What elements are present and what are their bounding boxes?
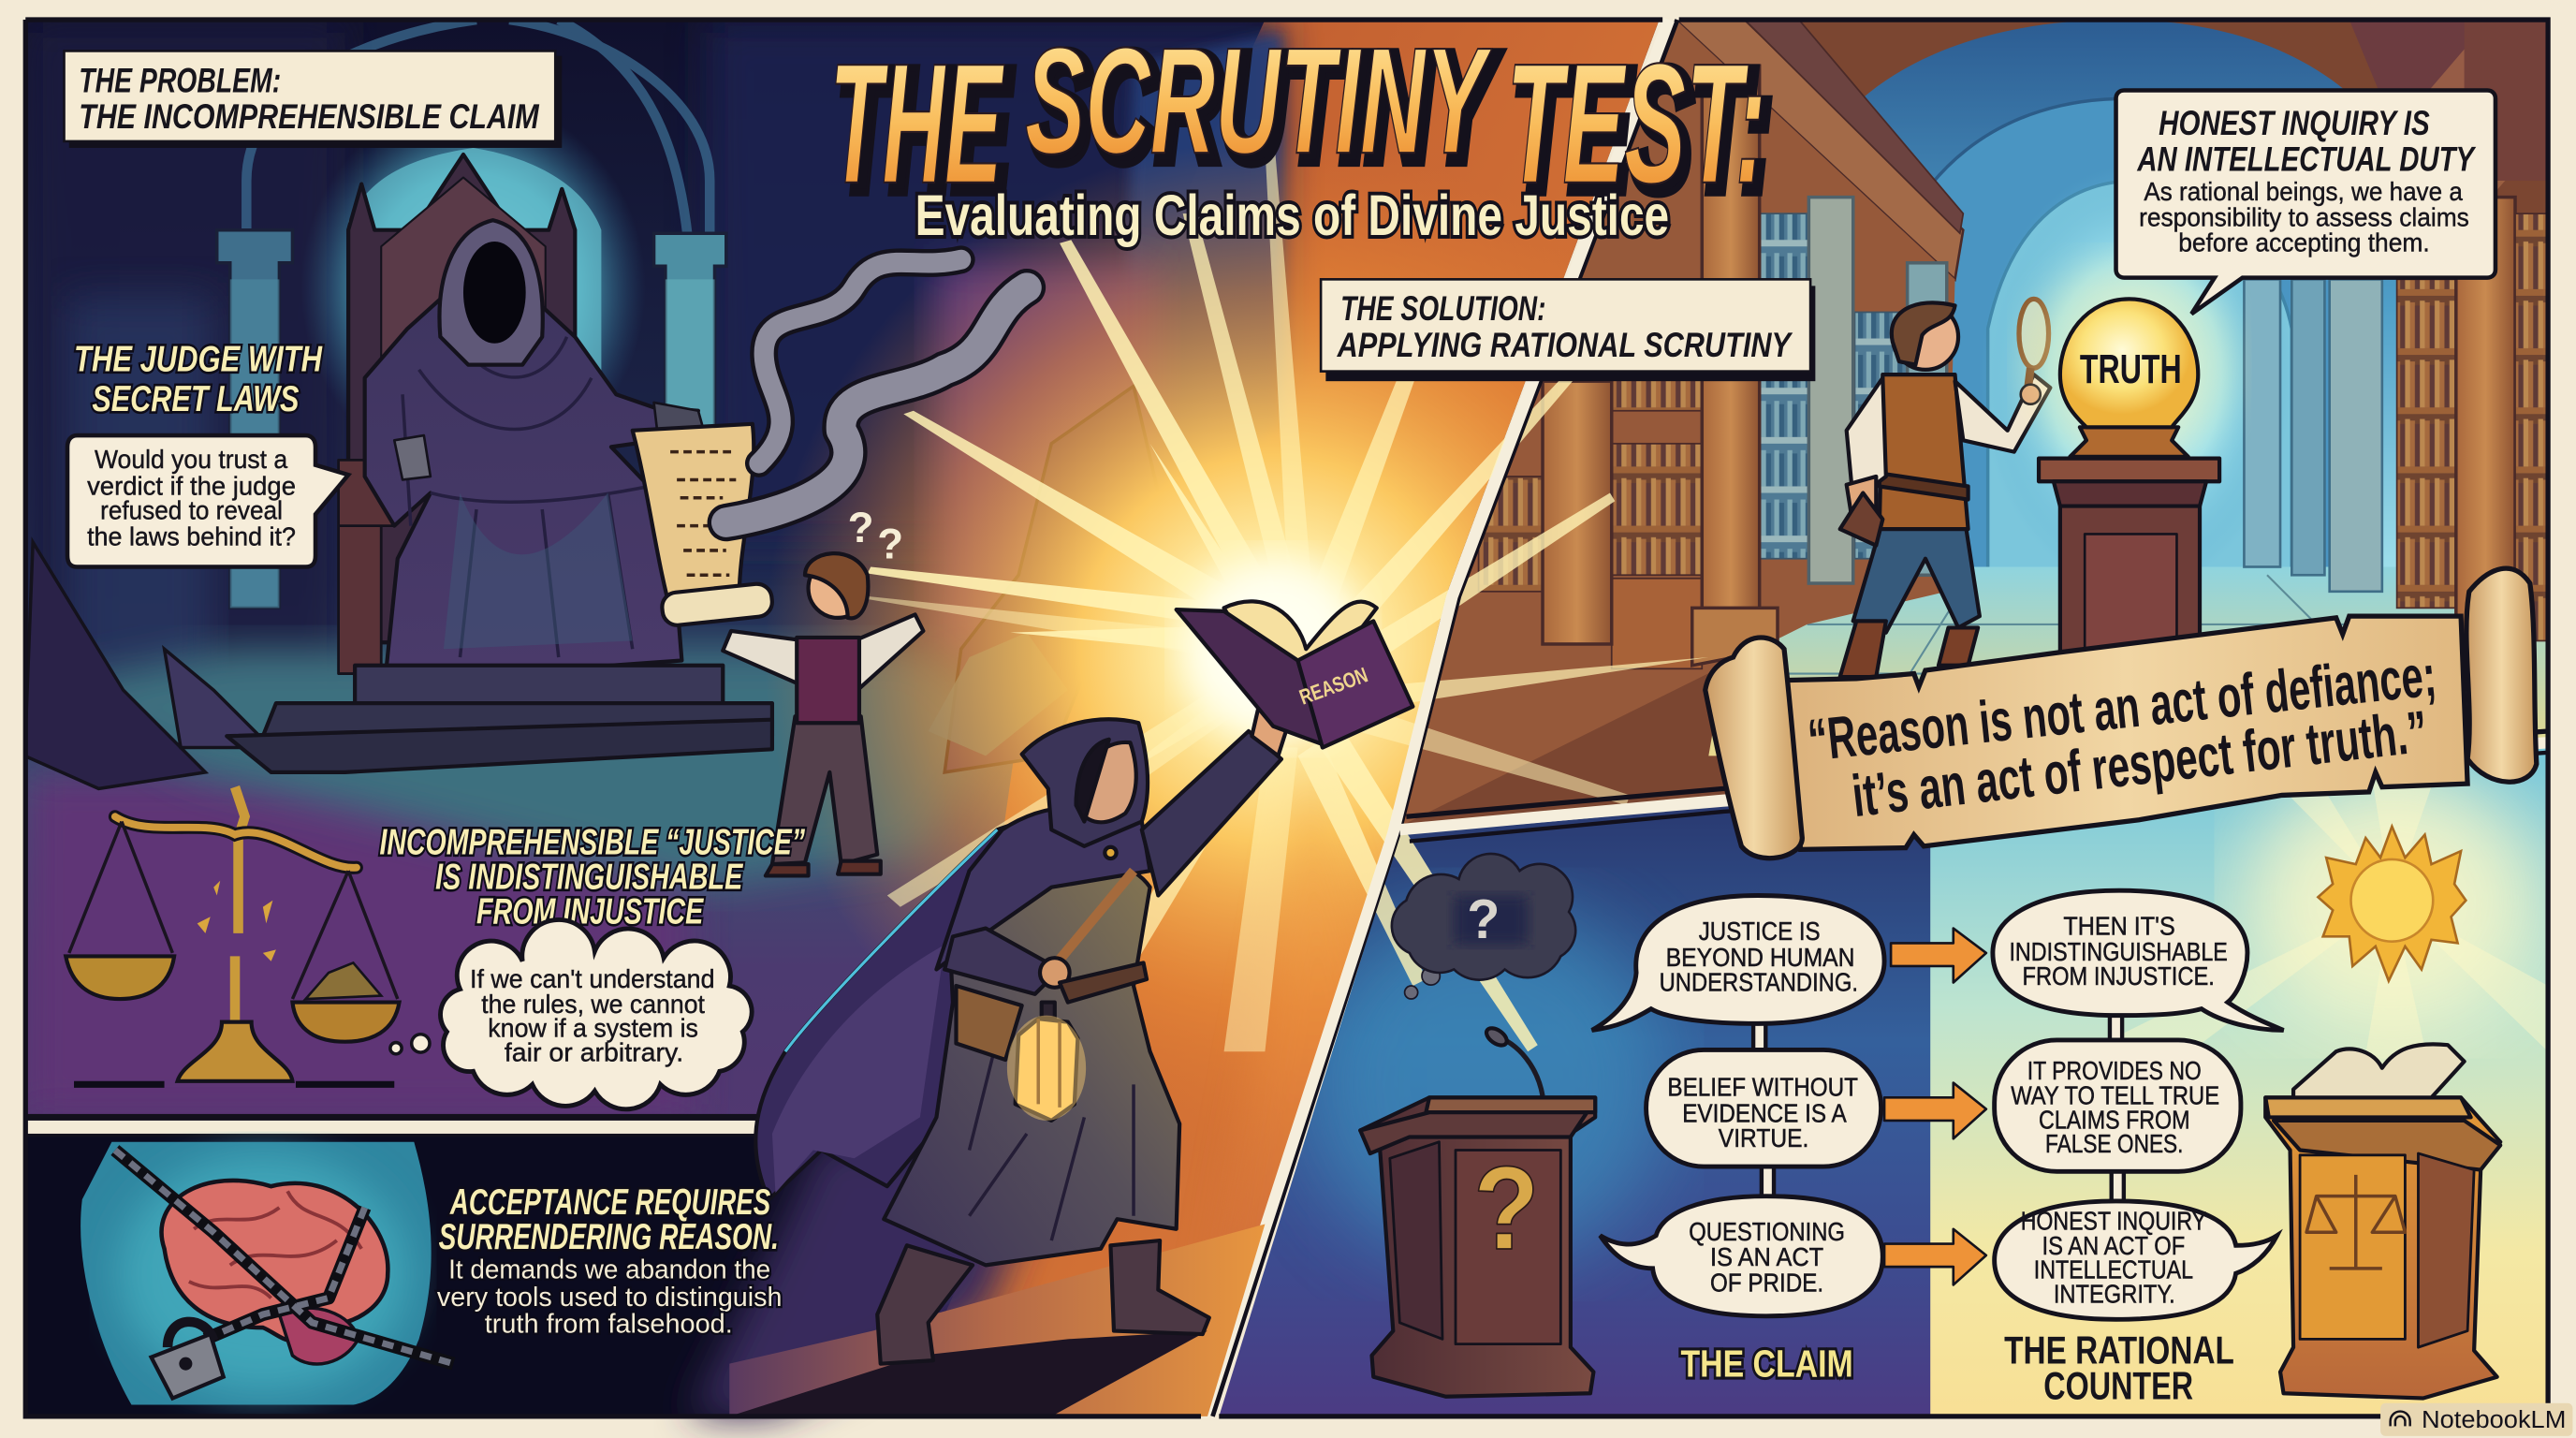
arrow 2	[1884, 1083, 1986, 1138]
book of reason: REASON	[1296, 662, 1370, 710]
strap	[1051, 871, 1134, 969]
broken scales of justice	[66, 787, 400, 1084]
padlock	[168, 1322, 213, 1347]
panel: the claim side	[1220, 806, 1930, 1414]
right boot	[1110, 1240, 1209, 1334]
speech bubble: would you trust a verdict: verdict if the judge	[87, 471, 296, 500]
badge icon	[2391, 1412, 2410, 1426]
counter bubble 2: WAY TO TELL TRUE	[2011, 1080, 2219, 1109]
heading box: the problem: THE INCOMPREHENSIBLE CLAIM	[79, 97, 540, 136]
floor	[1708, 566, 2548, 756]
NotebookLM badge	[2380, 1403, 2572, 1436]
counter bubble 1: THEN IT'S	[2063, 912, 2175, 941]
panel: the rational counter side	[1930, 723, 2554, 1430]
thought bubble: rules: If we can't understand	[470, 964, 714, 993]
claim bubble 2: VIRTUE.	[1719, 1123, 1808, 1152]
title	[829, 17, 1773, 248]
lower-left panel divider	[24, 1114, 829, 1138]
boy with question marks	[723, 504, 923, 875]
hood	[1022, 719, 1148, 846]
lantern	[1016, 1019, 1077, 1121]
hooded figure with lantern	[755, 694, 1290, 1364]
title: THE	[838, 35, 1013, 226]
counter bubble 3: INTELLECTUAL	[2034, 1255, 2193, 1284]
comparison arrows	[1884, 929, 1986, 1284]
right columns and shelves	[2244, 279, 2280, 566]
quote scroll banner	[1705, 568, 2537, 858]
ceiling ribs	[1676, 20, 1963, 279]
judge hand	[654, 403, 707, 440]
cave glow	[80, 1142, 432, 1405]
scroll of secret laws	[633, 424, 773, 626]
orb base	[2070, 427, 2188, 457]
burst of light	[777, 154, 1526, 1129]
shoulder cape	[936, 807, 1150, 969]
reason podium with open book	[2265, 1044, 2500, 1399]
speech bubble: honest inquiry: responsibility to assess claims	[2139, 202, 2469, 231]
thought bubble: rules: fair or arbitrary.	[505, 1038, 683, 1067]
thought bubble: rules	[390, 919, 752, 1109]
label: the rational counter: THE RATIONAL	[2004, 1328, 2234, 1372]
heading box: the problem: THE PROBLEM:	[79, 61, 281, 99]
label: the claim: THE CLAIM	[1680, 1343, 1853, 1386]
question marks: ?	[877, 521, 903, 568]
title: TEST:	[1506, 28, 1766, 219]
heading box: the solution	[1321, 279, 1815, 381]
speech bubble: would you trust a verdict: refused to reveal	[100, 496, 283, 525]
text: acceptance requires surrendering reason	[437, 1182, 782, 1339]
claim bubble 1: UNDERSTANDING.	[1660, 967, 1858, 996]
right roll	[2466, 568, 2537, 782]
claim bubble 3: OF PRIDE.	[1710, 1268, 1823, 1297]
speech bubble: would you trust a verdict: Would you trust a	[95, 445, 288, 474]
robe	[365, 299, 698, 670]
claim bubble 1: BEYOND HUMAN	[1666, 943, 1854, 972]
counter bubble 2: CLAIMS FROM	[2039, 1106, 2190, 1135]
NotebookLM badge: NotebookLM	[2422, 1405, 2566, 1433]
rays of light	[822, 148, 1708, 1051]
central arch	[1865, 22, 2396, 567]
torso	[1880, 374, 1969, 529]
claim bubble 3	[1600, 1196, 1882, 1316]
counter bubble 3: HONEST INQUIRY	[2021, 1207, 2206, 1236]
throne	[348, 154, 575, 642]
panel: the solution, library	[1397, 20, 2550, 842]
text: acceptance requires surrendering reason: very tools used to distinguish	[437, 1283, 782, 1313]
pedestal	[2060, 481, 2200, 657]
ground under the hooded figure	[729, 1224, 1265, 1416]
claim bubble 2: EVIDENCE IS A	[1682, 1099, 1847, 1128]
counter bubble 1: FROM INJUSTICE.	[2022, 961, 2215, 990]
claim bubble 1	[1592, 895, 1884, 1051]
thought bubble: rules: know if a system is	[488, 1013, 698, 1042]
cloak	[755, 805, 1134, 1199]
left pillars	[1543, 381, 1612, 644]
text: acceptance requires surrendering reason: SURRENDERING REASON.	[439, 1217, 779, 1257]
panel: acceptance requires surrendering reason	[24, 1137, 1051, 1416]
gothic arches	[242, 22, 715, 232]
heading: incomprehensible justice: IS INDISTINGUISHABLE	[435, 857, 743, 897]
heading: incomprehensible justice: INCOMPREHENSIBLE “JUSTICE”	[379, 823, 806, 863]
speech bubble: would you trust a verdict: the laws behind it?	[87, 522, 296, 551]
question marks	[848, 504, 903, 568]
cavern rock	[944, 386, 1158, 772]
speech bubble: honest inquiry	[2116, 91, 2496, 314]
left boot	[877, 1245, 973, 1364]
label: the rational counter	[2004, 1328, 2234, 1407]
raised arm	[1142, 731, 1281, 895]
counter bubble 1: INDISTINGUISHABLE	[2009, 937, 2228, 966]
comparison bubbles: the rational counter	[1993, 890, 2284, 1319]
text: acceptance requires surrendering reason: truth from falsehood.	[485, 1309, 733, 1339]
magnifying glass	[2019, 299, 2049, 404]
speech bubble: honest inquiry: HONEST INQUIRY IS	[2159, 104, 2430, 142]
claim bubble 2	[1647, 1049, 1881, 1199]
hood shadow	[463, 242, 526, 344]
hood	[439, 220, 543, 365]
counter bubble 3: INTEGRITY.	[2054, 1280, 2175, 1309]
floor	[24, 649, 1003, 888]
counter bubble 3	[1995, 1201, 2277, 1319]
question marks: ?	[848, 504, 874, 551]
robe skirt	[884, 859, 1179, 1265]
belt	[1060, 962, 1147, 1003]
orb	[2060, 299, 2198, 427]
speech bubble: honest inquiry: before accepting them.	[2178, 228, 2430, 257]
heading: the judge with secret laws: SECRET LAWS	[92, 379, 300, 419]
panel diagonal dividers	[1204, 20, 2548, 1416]
heading: the judge with secret laws	[74, 340, 323, 419]
counter bubble 2: IT PROVIDES NO	[2027, 1056, 2202, 1085]
title: TEST:	[1513, 35, 1773, 226]
steps	[355, 666, 723, 703]
thought bubble: rules: the rules, we cannot	[481, 990, 705, 1019]
claim bubble 3: QUESTIONING	[1689, 1217, 1845, 1246]
head	[1893, 304, 1958, 370]
label: the rational counter: COUNTER	[2043, 1363, 2193, 1407]
hand holding book	[1251, 694, 1290, 756]
columns	[217, 230, 726, 608]
panel: the problem, dark gothic hall	[24, 20, 1667, 1416]
chains	[115, 1151, 453, 1364]
heading box: the solution: APPLYING RATIONAL SCRUTINY	[1337, 326, 1793, 364]
book of reason	[1177, 601, 1412, 748]
claim bubble 2: BELIEF WITHOUT	[1667, 1073, 1858, 1102]
speech bubble: honest inquiry: AN INTELLECTUAL DUTY	[2137, 140, 2477, 179]
counter bubble 3: IS AN ACT OF	[2042, 1231, 2185, 1260]
belt	[1880, 473, 1969, 500]
satchel	[956, 986, 1022, 1060]
icon: chained brain	[115, 1151, 453, 1399]
truth orb on pedestal	[2027, 263, 2231, 657]
text: acceptance requires surrendering reason: It demands we abandon the	[448, 1255, 770, 1284]
counter bubble 2: FALSE ONES.	[2045, 1129, 2183, 1158]
claim podium with microphone	[1360, 1025, 1595, 1397]
left wall shelves	[1399, 20, 1955, 827]
scholar with magnifying glass	[1840, 299, 2050, 677]
legs	[1853, 509, 1980, 633]
judge on throne	[227, 154, 772, 772]
heading: incomprehensible justice: FROM INJUSTICE	[476, 891, 704, 932]
heading: incomprehensible justice	[379, 823, 806, 932]
heading box: the problem	[65, 51, 562, 148]
icon: sun	[2318, 827, 2466, 981]
subtitle: Evaluating Claims of Divine Justice	[915, 183, 1669, 248]
scales emblem	[2306, 1175, 2405, 1269]
counter bubble 2	[1995, 1040, 2241, 1204]
heading: the judge with secret laws: THE JUDGE WITH	[74, 340, 323, 380]
open book	[2293, 1044, 2465, 1097]
left roll	[1705, 638, 1802, 858]
arrow 3	[1884, 1229, 1986, 1284]
speech bubble: would you trust a verdict	[67, 435, 348, 566]
claim podium with microphone: ?	[1473, 1142, 1540, 1274]
arrow 1	[1891, 929, 1986, 983]
lower arm	[944, 929, 1060, 994]
comparison bubbles: the claim	[1592, 895, 1884, 1316]
claim bubble 1: JUSTICE IS	[1699, 917, 1821, 946]
text: acceptance requires surrendering reason: ACCEPTANCE REQUIRES	[449, 1182, 770, 1223]
speech bubble: honest inquiry: As rational beings, we have a	[2144, 177, 2463, 206]
counter bubble 1	[1993, 890, 2284, 1043]
title: THE	[829, 28, 1004, 219]
icon: dark thought cloud with question mark: ?	[1467, 888, 1500, 950]
stained glass window light	[308, 135, 638, 403]
title: SCRUTINY	[1032, 23, 1499, 192]
truth orb on pedestal: TRUTH	[2080, 346, 2182, 392]
claim bubble 3: IS AN ACT	[1710, 1242, 1823, 1271]
satchel	[1840, 493, 1882, 546]
title: SCRUTINY	[1025, 17, 1492, 185]
smoke wisps from the scroll	[726, 259, 1027, 522]
heading box: the solution: THE SOLUTION:	[1340, 289, 1546, 328]
icon: dark thought cloud with question mark	[1392, 854, 1575, 999]
